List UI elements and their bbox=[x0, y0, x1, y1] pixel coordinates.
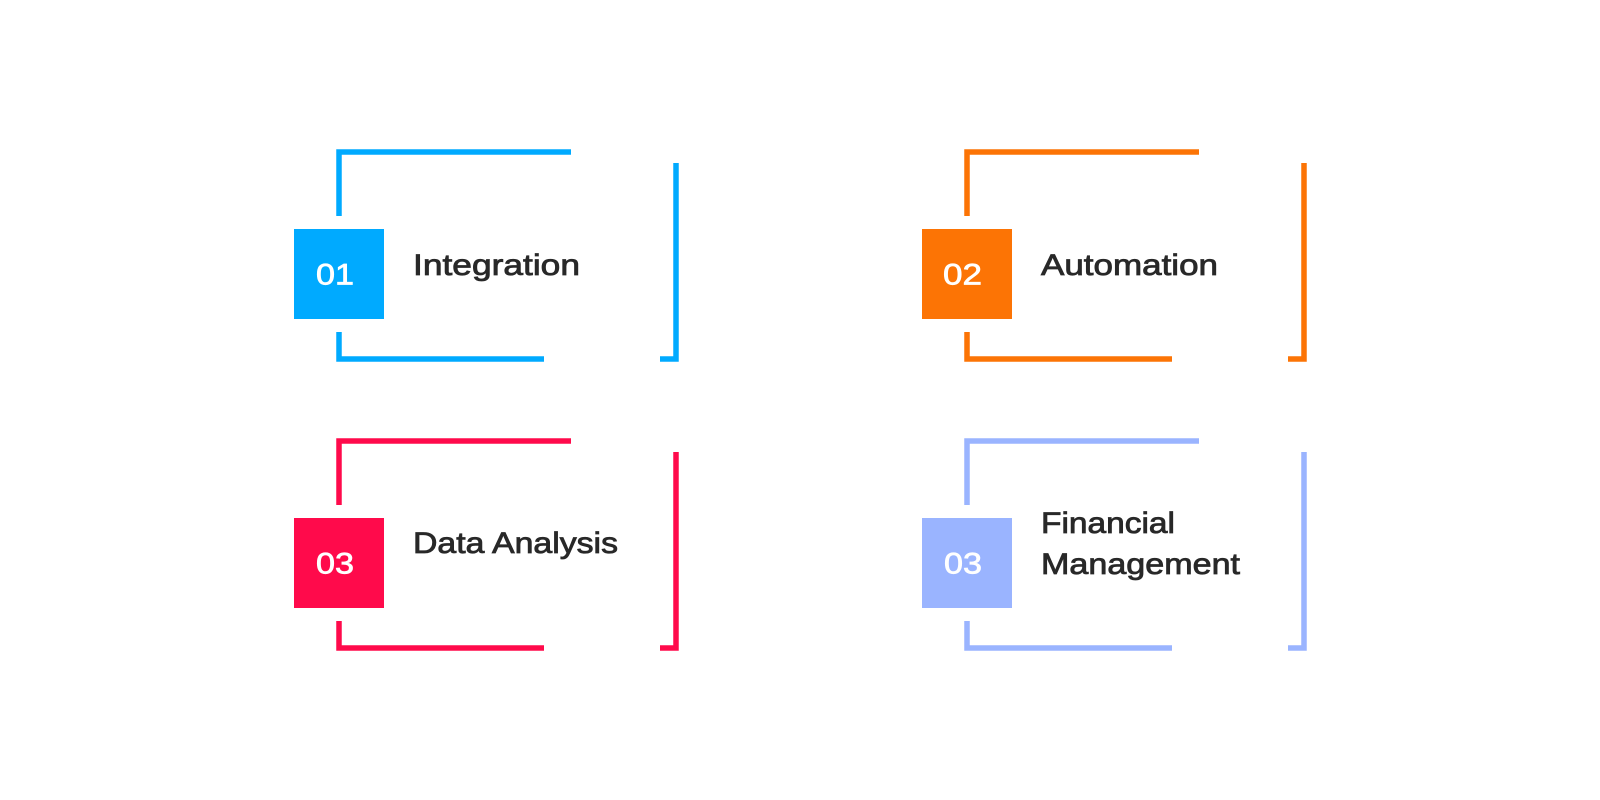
number badge 03: 03 bbox=[316, 548, 354, 580]
bracket: right bbox=[1288, 452, 1304, 648]
bracket: right bbox=[1288, 163, 1304, 359]
label: Financial Management: Management bbox=[1041, 548, 1241, 581]
label: Financial Management bbox=[1041, 507, 1241, 581]
bracket: top left bbox=[339, 441, 571, 505]
panel: 02 Automation bbox=[922, 152, 1304, 359]
bracket: bottom left bbox=[339, 621, 544, 648]
number badge 01 bbox=[294, 229, 384, 319]
bracket: bottom left bbox=[967, 332, 1172, 359]
bracket: top left bbox=[967, 441, 1199, 505]
panel: 01 Integration bbox=[294, 152, 676, 359]
bracket: top left bbox=[967, 152, 1199, 216]
number badge 02: 02 bbox=[943, 258, 982, 292]
label: Automation: Automation bbox=[1041, 249, 1218, 282]
bracket: bottom left bbox=[339, 332, 544, 359]
number badge 01: 01 bbox=[316, 258, 354, 292]
number badge 03 bbox=[294, 518, 384, 608]
number badge 03: 03 bbox=[944, 548, 982, 580]
panel: 03 Data Analysis bbox=[294, 441, 676, 648]
number badge 03 bbox=[922, 518, 1012, 608]
label: Data Analysis: Data Analysis bbox=[413, 527, 618, 560]
label: Integration: Integration bbox=[413, 249, 580, 282]
bracket: right bbox=[660, 163, 676, 359]
panel: 03 Financial Management bbox=[922, 441, 1304, 648]
bracket: right bbox=[660, 452, 676, 648]
bracket: bottom left bbox=[967, 621, 1172, 648]
label: Financial Management: Financial bbox=[1041, 507, 1175, 540]
number badge 02 bbox=[922, 229, 1012, 319]
bracket: top left bbox=[339, 152, 571, 216]
